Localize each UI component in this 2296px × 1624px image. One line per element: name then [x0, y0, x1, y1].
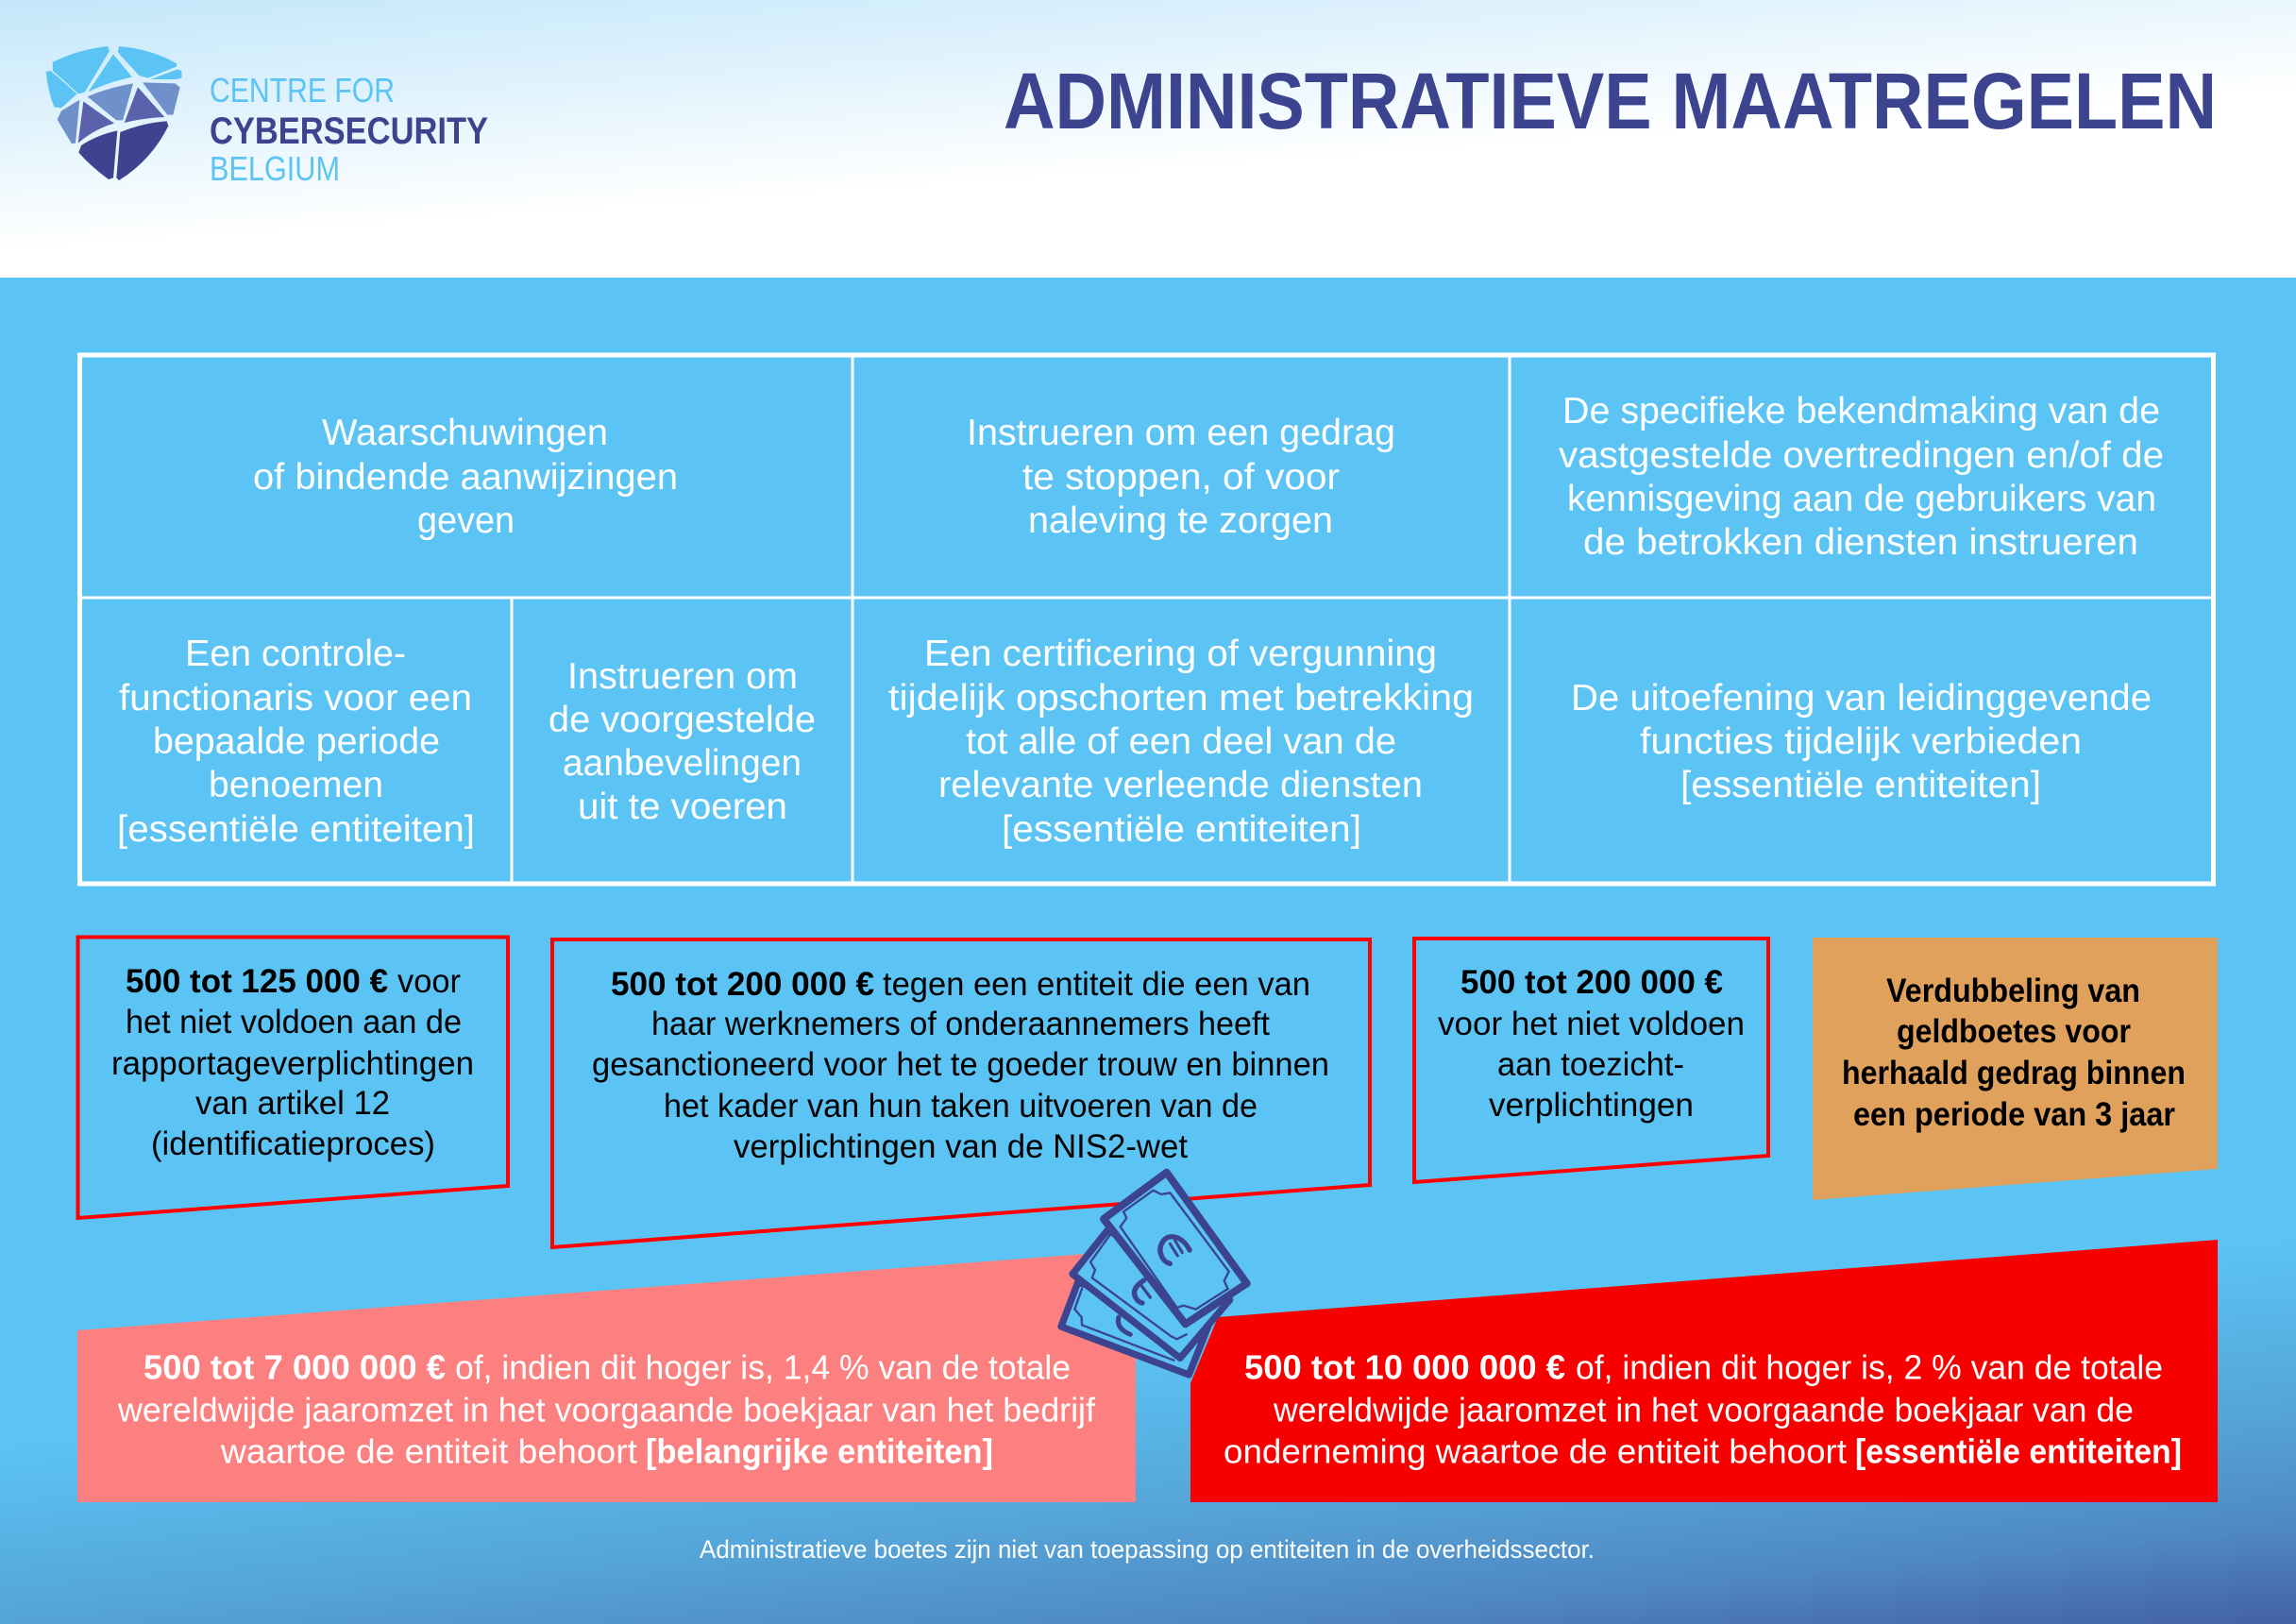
front note — [1104, 1173, 1247, 1324]
fine box: 200 000 supervision — [1414, 939, 1768, 1182]
cell: compliance officer: [essentiële entiteiten] — [117, 809, 475, 850]
logo: Centre for Cybersecurity Belgium — [46, 46, 488, 188]
fine box: 125 000: rapportageverplichtingen — [111, 1045, 474, 1082]
orange box: doubling of fines: geldboetes voor — [1897, 1013, 2131, 1050]
fine box: 200 000 sanctioned employees: tegen een entiteit die een van — [883, 966, 1310, 1003]
measures table — [79, 355, 2214, 884]
cell: warnings: geven — [417, 500, 515, 541]
cell: recommendations — [549, 656, 816, 827]
cell: specific disclosure: vastgestelde overtredingen en/of de — [1559, 435, 2164, 476]
logo text — [210, 71, 488, 188]
icon: shield — [46, 46, 182, 180]
cell: stop behaviour: te stoppen, of voor — [1022, 457, 1340, 498]
fine box: 125 000: voor — [397, 963, 461, 1000]
cell: warnings: Waarschuwingen — [322, 413, 608, 453]
fine box: 200 000 sanctioned employees — [552, 939, 1370, 1247]
cell: warnings: of bindende aanwijzingen — [253, 457, 678, 498]
cell: ban managers: functies tijdelijk verbieden — [1640, 721, 2082, 762]
cell: recommendations: Instrueren om — [567, 656, 798, 697]
pink box: important entities fine: waartoe de entiteit behoort — [220, 1431, 637, 1471]
fine box: 200 000 supervision: aan toezicht- — [1497, 1046, 1684, 1083]
fine box: 125 000: van artikel 12 — [195, 1085, 390, 1122]
cell: suspend certification: tijdelijk opschorten met betrekking — [888, 678, 1474, 719]
pink box: important entities fine: of, indien dit hoger is, 1,4 % van de totale — [455, 1348, 1071, 1386]
red box: essential entities fine: wereldwijde jaaromzet in het voorgaande boekjaar van de — [1273, 1390, 2134, 1429]
cell: specific disclosure: kennisgeving aan de gebruikers van — [1567, 479, 2156, 519]
cell: ban managers: [essentiële entiteiten] — [1680, 765, 2041, 805]
fine box: 125 000: (identificatieproces) — [151, 1125, 435, 1162]
cell: compliance officer: Een controle- — [185, 634, 406, 674]
cell: compliance officer: functionaris voor een — [119, 678, 472, 719]
red box: essential entities fine: of, indien dit hoger is, 2 % van de totale — [1576, 1348, 2163, 1386]
red box: essential entities fine: onderneming waartoe de entiteit behoort — [1224, 1431, 1847, 1471]
cell: stop behaviour: Instrueren om een gedrag — [967, 413, 1395, 453]
cell: suspend certification: tot alle of een deel van de — [966, 721, 1396, 762]
fine box: 200 000 sanctioned employees: haar werknemers of onderaannemers heeft — [651, 1006, 1270, 1042]
middle note — [1072, 1230, 1230, 1358]
cell: stop behaviour — [967, 413, 1395, 541]
header background — [0, 0, 2296, 279]
fine box: 200 000 supervision: voor het niet voldoen — [1438, 1006, 1745, 1042]
red box: essential entities fine: 500 tot 10 000 000 € — [1244, 1348, 1565, 1386]
fine box: 200 000 sanctioned employees: het kader van hun taken uitvoeren van de — [664, 1088, 1258, 1125]
footer note: Administratieve boetes zijn niet van toepassing op entiteiten in de overheidssector. — [700, 1535, 1595, 1564]
fine box: 125 000 — [77, 937, 508, 1218]
back note — [1061, 1282, 1210, 1375]
fine box: 200 000 sanctioned employees: 500 tot 200 000 € — [611, 966, 874, 1003]
logo text: CENTRE FOR — [210, 71, 395, 110]
red box: essential entities fine: [essentiële entiteiten] — [1855, 1431, 2182, 1471]
cell: suspend certification: Een certificering of vergunning — [924, 634, 1437, 674]
cell: recommendations: de voorgestelde — [549, 700, 816, 740]
orange box: doubling of fines: herhaald gedrag binnen — [1842, 1055, 2186, 1091]
icon: euro banknotes — [1061, 1173, 1247, 1375]
pink box: important entities fine: 500 tot 7 000 000 € — [144, 1348, 446, 1386]
orange box: doubling of fines — [1813, 938, 2218, 1200]
cell: compliance officer: bepaalde periode — [153, 721, 440, 762]
cell: stop behaviour: naleving te zorgen — [1028, 500, 1333, 541]
fine box: 200 000 supervision: verplichtingen — [1489, 1087, 1694, 1124]
table grid — [79, 355, 2214, 884]
cell: ban managers — [1571, 678, 2152, 805]
orange box: doubling of fines: Verdubbeling van — [1886, 973, 2140, 1009]
pink box: important entities fine: wereldwijde jaaromzet in het voorgaande boekjaar van het bedrijf — [117, 1390, 1096, 1429]
cell: recommendations: uit te voeren — [578, 787, 787, 827]
cell: specific disclosure: De specifieke bekendmaking van de — [1562, 391, 2160, 431]
fine box: 200 000 supervision: 500 tot 200 000 € — [1460, 964, 1723, 1001]
cell: compliance officer: benoemen — [209, 765, 383, 805]
logo text: CYBERSECURITY — [210, 110, 488, 152]
fine box: 200 000 sanctioned employees: verplichtingen van de NIS2-wet — [734, 1128, 1188, 1165]
cell: suspend certification: relevante verleende diensten — [938, 765, 1423, 805]
cell: warnings — [253, 413, 678, 541]
pink box: important entities fine — [77, 1250, 1136, 1502]
cell: compliance officer — [117, 634, 475, 850]
cell: specific disclosure: de betrokken diensten instrueren — [1583, 522, 2138, 563]
cell: suspend certification — [888, 634, 1474, 850]
orange box: doubling of fines: een periode van 3 jaar — [1853, 1096, 2175, 1133]
fine box: 125 000: het niet voldoen aan de — [126, 1004, 462, 1040]
red box: essential entities fine — [1190, 1240, 2218, 1502]
cell: ban managers: De uitoefening van leidinggevende — [1571, 678, 2152, 719]
cell: recommendations: aanbevelingen — [563, 743, 802, 784]
fine box: 200 000 sanctioned employees: gesanctioneerd voor het te goeder trouw en binnen — [592, 1046, 1329, 1083]
fine box: 125 000: 500 tot 125 000 € — [126, 963, 388, 1000]
logo text: BELGIUM — [210, 149, 340, 188]
cell: specific disclosure — [1559, 391, 2164, 563]
cell: suspend certification: [essentiële entiteiten] — [1002, 809, 1361, 850]
pink box: important entities fine: [belangrijke entiteiten] — [646, 1431, 993, 1471]
